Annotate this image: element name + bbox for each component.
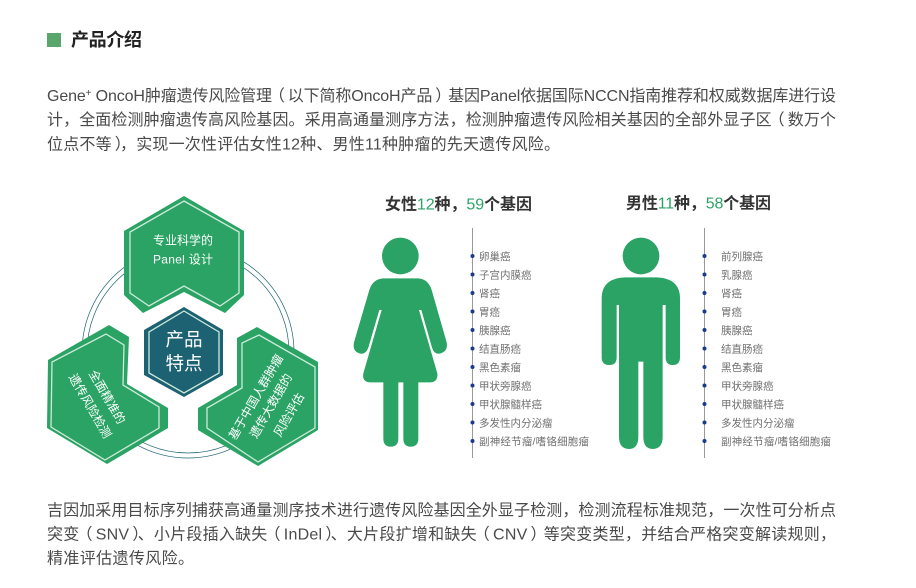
closing paragraph: 精准评估遗传风险。 [47, 544, 194, 568]
list: male cancers: 胃癌 [721, 306, 742, 318]
list: male cancers: 黑色素瘤 [721, 361, 763, 374]
heading: product introduction: 产品介绍 [71, 30, 142, 50]
list: female cancers: 甲状腺髓样癌 [479, 398, 542, 411]
list: male cancers: 胰腺癌 [721, 324, 753, 337]
intro paragraph: 计，全面检测肿瘤遗传高风险基因。采用高通量测序方法，检测肿瘤遗传风险相关基因的全部外显子区（数万个 [47, 106, 836, 130]
intro paragraph: （以下简称OncoH产品）基因Panel依据国际NCCN指南推荐和权威数据库进行设 [269, 88, 836, 105]
hexagon: professional panel design: 专业科学的 [153, 232, 213, 248]
double ring [82, 246, 294, 458]
hexagon: center product features: 产品 [165, 329, 203, 350]
icon: male figure [602, 238, 680, 449]
list: male cancers: 多发性内分泌瘤 [721, 416, 795, 430]
list: female cancers: 胰腺癌 [479, 324, 511, 337]
closing paragraph: 吉因加采用目标序列捕获高通量测序技术进行遗传风险基因全外显子检测，检测流程标准规范，一次性可分析点 [47, 496, 836, 520]
hexagon: comprehensive accurate detection: 遗传风险检测 [66, 371, 115, 441]
intro paragraph: Gene [47, 88, 86, 105]
hexagon: comprehensive accurate detection [47, 325, 168, 464]
heading: female: 女性12种，59个基因 [385, 194, 532, 214]
list: female cancers: 卵巢癌 [479, 250, 511, 263]
list: male cancers: 甲状腺髓样癌 [721, 398, 784, 411]
hexagon: center product features [144, 307, 223, 397]
hexagon: professional panel design [124, 196, 244, 313]
icon: female figure [354, 238, 447, 447]
list: male cancers: 甲状旁腺癌 [721, 380, 774, 392]
intro paragraph [47, 87, 836, 154]
hexagon: Chinese population big data: 基于中国人群肿瘤 [225, 351, 286, 442]
list: female cancers: 甲状旁腺癌 [479, 380, 532, 392]
list: male cancers: 乳腺癌 [721, 268, 753, 282]
hexagon: Chinese population big data: 遗传大数据的 [246, 371, 295, 441]
hexagon: Chinese population big data: 风险评估 [270, 390, 307, 439]
list: female cancers: 子宫内膜癌 [479, 268, 532, 282]
hexagon: professional panel design: Panel 设计 [153, 252, 213, 266]
list: female cancers: 副神经节瘤/嗜铬细胞瘤 [479, 435, 590, 448]
list: female cancers: 结直肠癌 [479, 342, 521, 356]
hexagon: Chinese population big data [198, 327, 318, 466]
list: male cancers: 肾癌 [721, 287, 742, 300]
list: female cancers: 肾癌 [479, 287, 500, 300]
hexagon: center product features: 特点 [165, 353, 203, 374]
intro paragraph: 位点不等），实现一次性评估女性12种、男性11种肿瘤的先天遗传风险。 [47, 130, 560, 154]
heading: male: 男性11种，58个基因 [626, 194, 771, 212]
closing paragraph: 突变（SNV）、小片段插入缺失（InDel）、大片段扩增和缺失（CNV）等突变类型，并结合严格突变解读规则， [47, 520, 836, 544]
list: female cancers: 胃癌 [479, 306, 500, 318]
hexagon: comprehensive accurate detection: 全面精准的 [86, 367, 129, 426]
intro paragraph: OncoH肿瘤遗传风险管理 [91, 87, 272, 105]
closing paragraph [47, 496, 836, 568]
list: male cancers: 前列腺癌 [721, 250, 763, 263]
list: female cancers: 多发性内分泌瘤 [479, 416, 553, 430]
diagram: product features hexagons [47, 196, 318, 466]
list: male cancers [702, 228, 832, 458]
list: female cancers: 黑色素瘤 [479, 361, 521, 374]
intro paragraph: + [86, 88, 92, 99]
list: female cancers [470, 228, 590, 458]
list: male cancers: 副神经节瘤/嗜铬细胞瘤 [721, 435, 832, 448]
list: male cancers: 结直肠癌 [721, 342, 763, 356]
